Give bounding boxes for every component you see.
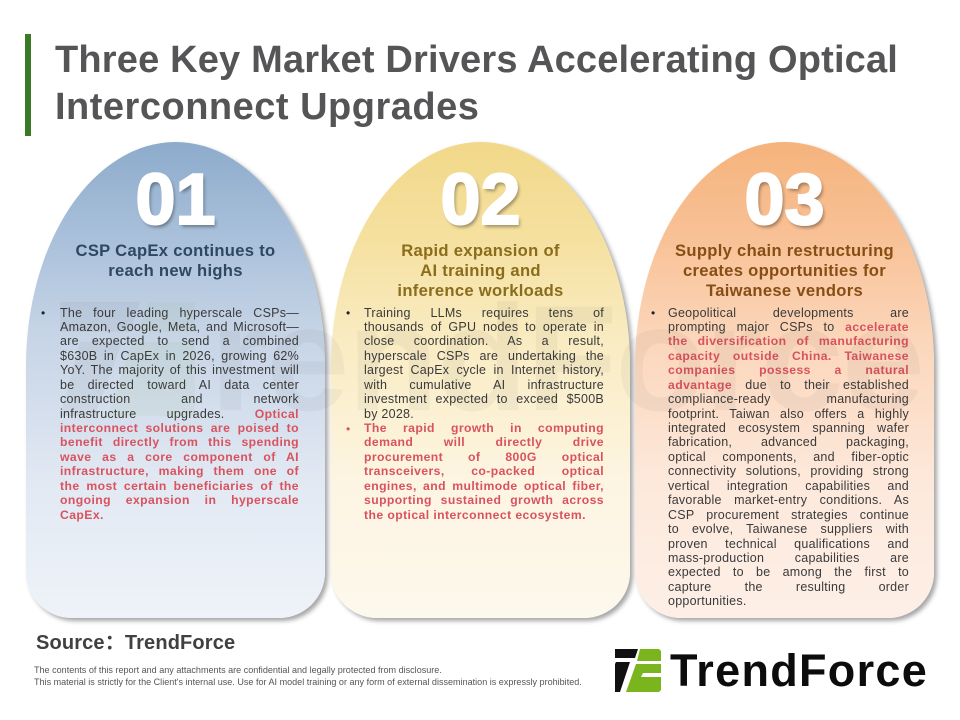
text block: CSP CapEx: benefit directly from this spending <box>60 435 299 449</box>
heading: CSP CapEx: CSP CapEx continues to <box>76 241 275 260</box>
text block: supply chain: CSP procurement strategies continue <box>668 508 909 522</box>
text block: supply chain: mass-production capabilities are <box>668 551 909 565</box>
source: Source：TrendForce <box>36 632 235 654</box>
text block: supply chain <box>668 306 909 608</box>
text block: AI workloads <box>364 306 604 522</box>
title: Three Key Market Drivers Accelerating Optical <box>55 39 898 81</box>
text block: supply chain: connectivity solutions, providing strong <box>668 464 909 478</box>
logo wordmark: TrendForce <box>670 645 928 696</box>
text block: supply chain: Geopolitical developments are <box>668 306 909 320</box>
text block: AI workloads: supporting sustained growth across <box>364 493 604 507</box>
text block: AI workloads: hyperscale CSPs are undertaking the <box>364 349 604 363</box>
text block: supply chain: the diversification of manufacturing <box>668 334 909 348</box>
text block: CSP CapEx: are expected to send a combined <box>60 334 299 348</box>
number 01: 01 <box>135 160 216 240</box>
text block: CSP CapEx: CapEx. <box>60 508 104 522</box>
text block: AI workloads: with cumulative AI infrastructure <box>364 378 604 392</box>
text block: supply chain: capture the resulting order <box>668 580 909 594</box>
text block: supply chain: proven technical qualifications and <box>668 536 909 550</box>
number 03: 03 <box>744 160 825 240</box>
text block: AI workloads: thousands of GPU nodes to operate in <box>364 320 604 334</box>
heading: supply chain: Supply chain restructuring <box>675 241 894 260</box>
heading: supply chain <box>675 241 894 300</box>
heading: supply chain: Taiwanese vendors <box>706 281 863 300</box>
text block: supply chain: fabrication, advanced packaging, <box>668 435 909 449</box>
text block: supply chain: prompting major CSPs to accelerate <box>668 320 909 334</box>
text block: CSP CapEx: construction and network <box>60 392 299 406</box>
panel: AI workloads <box>331 142 630 618</box>
text block: CSP CapEx: wave as a core component of AI <box>60 450 299 464</box>
heading: CSP CapEx <box>76 241 275 280</box>
text block: CSP CapEx: ongoing expansion in hyperscale <box>60 493 299 507</box>
logo: TrendForce <box>615 645 928 696</box>
title <box>55 39 898 128</box>
text block: supply chain: capacity outside China. Taiwanese <box>668 349 909 363</box>
text block: CSP CapEx: interconnect solutions are poised to <box>60 421 299 435</box>
heading: AI workloads: AI training and <box>420 261 541 280</box>
heading: AI workloads: Rapid expansion of <box>401 241 560 260</box>
disclaimer <box>34 665 582 687</box>
number 02: 02 <box>440 160 521 240</box>
text block: AI workloads: the optical interconnect ecosystem. <box>364 508 586 522</box>
text block: AI workloads: Training LLMs requires tens of <box>364 306 604 320</box>
text block: supply chain: advantage due to their established <box>668 378 909 392</box>
text block: CSP CapEx: Amazon, Google, Meta, and Microsoft— <box>60 320 299 334</box>
title: Interconnect Upgrades <box>55 86 479 128</box>
logo mark <box>615 649 661 692</box>
text block: supply chain: companies possess a natural <box>668 363 909 377</box>
text block: supply chain: favorable market-entry conditions. As <box>668 493 909 507</box>
heading: AI workloads <box>397 241 564 300</box>
heading: CSP CapEx: reach new highs <box>108 261 243 280</box>
text block: AI workloads: demand will directly drive <box>364 435 604 449</box>
text block: AI workloads: procurement of 800G optical <box>364 450 604 464</box>
text block: CSP CapEx: infrastructure, making them one of <box>60 464 299 478</box>
panel: CSP CapEx <box>26 142 325 618</box>
text block: CSP CapEx: YoY. The majority of this investment will <box>60 363 299 377</box>
text block: supply chain: integrated ecosystem spanning wafer <box>668 421 909 435</box>
panel: supply chain <box>635 142 934 618</box>
text block: supply chain: opportunities. <box>668 594 747 608</box>
heading: supply chain: creates opportunities for <box>683 261 886 280</box>
text block: CSP CapEx: The four leading hyperscale CSPs— <box>60 306 299 320</box>
text block: supply chain: optical components, and fiber-optic <box>668 450 909 464</box>
text block: supply chain: footprint. Taiwan also offers a highly <box>668 407 909 421</box>
disclaimer: This material is strictly for the Client's internal use. Use for AI model training or any form of external dissemination is expressly prohibited. <box>34 677 582 687</box>
text block: AI workloads: by 2028. <box>364 407 414 421</box>
disclaimer: The contents of this report and any attachments are confidential and legally protected from disclosure. <box>34 665 442 675</box>
text block: AI workloads: transceivers, co-packed optical <box>364 464 604 478</box>
title accent bar <box>25 34 31 136</box>
text block: CSP CapEx <box>60 306 299 522</box>
text block: CSP CapEx: be directed toward AI data center <box>60 378 299 392</box>
text block: supply chain: compliance-ready manufacturing <box>668 392 909 406</box>
text block: supply chain: expected to be among the first to <box>668 565 909 579</box>
text block: AI workloads: close coordination. As a result, <box>364 334 604 348</box>
heading: AI workloads: inference workloads <box>397 281 564 300</box>
text block: supply chain: to evolve, Taiwanese suppliers with <box>668 522 909 536</box>
text block: CSP CapEx: $630B in CapEx in 2026, growing 62% <box>60 349 299 363</box>
text block: AI workloads: engines, and multimode optical fiber, <box>364 479 604 493</box>
text block: CSP CapEx: the most certain beneficiaries of the <box>60 479 299 493</box>
bullet marker: • <box>41 306 45 320</box>
text block: AI workloads: investment expected to exceed $500B <box>364 392 604 406</box>
bullet markers: • <box>346 306 350 320</box>
bullet markers <box>346 306 350 436</box>
text block: AI workloads: largest CapEx cycle in Internet history, <box>364 363 604 377</box>
bullet markers: • <box>346 422 350 436</box>
text block: CSP CapEx: infrastructure upgrades. Optical <box>60 407 299 421</box>
text block: supply chain: vertical integration capabilities and <box>668 479 909 493</box>
text block: AI workloads: The rapid growth in computing <box>364 421 604 435</box>
bullet marker: • <box>651 306 655 320</box>
